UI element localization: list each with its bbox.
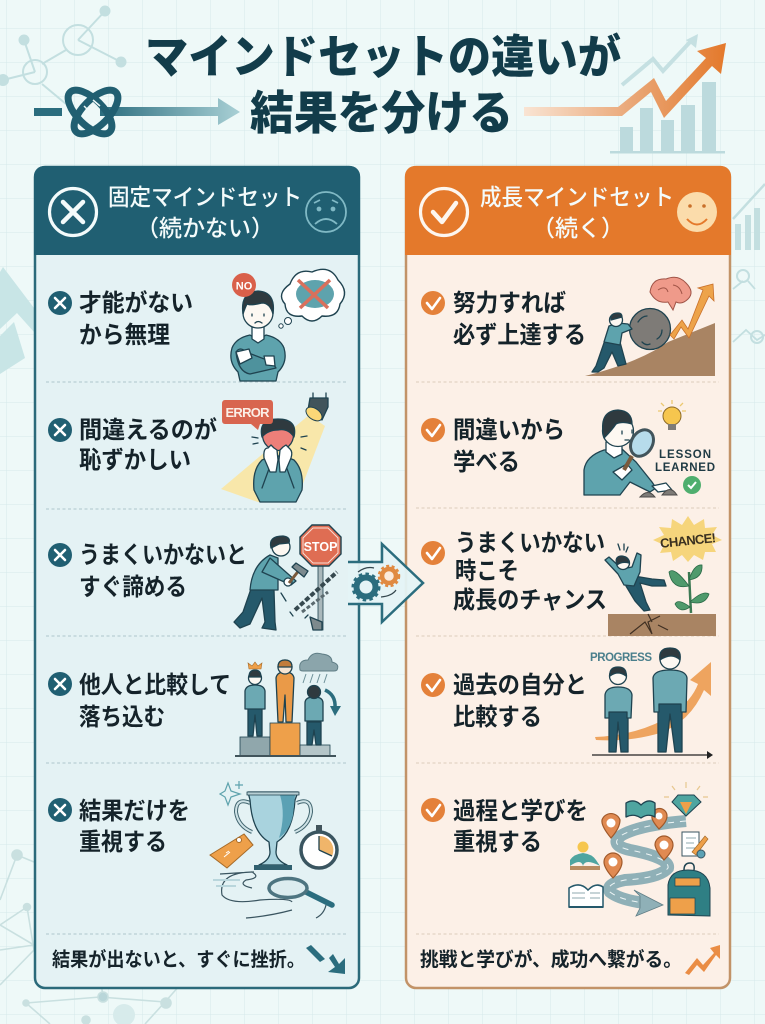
panel header: growth mindset (405, 166, 731, 255)
item 4: comparing: 他人と比較して (79, 672, 231, 699)
item 5: results only (48, 781, 337, 918)
bullet check (421, 798, 445, 822)
rain cloud (300, 653, 338, 683)
panel: fixed mindset (34, 166, 360, 988)
illustration: progress figures: PROGRESS (590, 652, 652, 664)
item 2: learn from mistakes (421, 400, 715, 497)
item 3: failure is chance: 成長のチャンス (453, 587, 607, 614)
gear teal (353, 574, 379, 600)
item 3: give up: すぐ諦める (79, 574, 187, 601)
panel header: growth mindset: 成長マインドセット (480, 184, 674, 210)
green check (683, 476, 701, 494)
thought bubble: crossed brain (279, 269, 345, 328)
illustration: falling person and sprout (605, 516, 722, 636)
bottom message: growth (420, 945, 720, 975)
illustration: person breaking chain at stop sign (234, 525, 341, 630)
icon: falling arrow (306, 945, 345, 974)
item 3: failure is chance: うまくいかない (455, 530, 605, 557)
title: 結果を分ける (250, 87, 513, 139)
background network top left (0, 6, 126, 104)
gear orange (379, 566, 399, 586)
person centre (276, 660, 294, 722)
item 2: embarrassed (48, 393, 328, 502)
bottom message: fixed: 結果が出ないと、すぐに挫折。 (52, 948, 305, 971)
illustration: person with magnifier (584, 400, 715, 497)
icon: check circle (420, 188, 468, 236)
diamond (664, 782, 708, 816)
item 4: compare with past self: 過去の自分と (453, 672, 587, 699)
bottom message: growth: 挑戦と学びが、成功へ繋がる。 (420, 948, 682, 971)
item 5: results only: 重視する (79, 829, 167, 856)
arrow between panels with gears (348, 544, 423, 622)
item 3: failure is chance (421, 516, 722, 636)
item 1: no talent: 才能がない (79, 289, 193, 317)
burst: CHANCE! (659, 530, 717, 551)
icon: tangled knot with arrow (34, 83, 240, 141)
background chart right (733, 184, 765, 343)
spotlight lamp (303, 393, 328, 424)
panel header: fixed mindset (34, 166, 360, 255)
location pins (602, 808, 673, 878)
item 4: comparing: 落ち込む (79, 704, 165, 731)
bullet cross (48, 672, 72, 696)
icon: smiling face (677, 192, 717, 232)
panel header: fixed mindset: 固定マインドセット (108, 184, 302, 210)
illustration: person hiding face in spotlight (221, 393, 328, 502)
light bulb (658, 400, 686, 430)
green book top (626, 801, 655, 818)
open book (569, 885, 603, 908)
item 4: compare with past self: 比較する (453, 704, 542, 731)
stopwatch (301, 825, 337, 868)
title (145, 31, 621, 139)
item 3: failure is chance: 時こそ (455, 558, 519, 585)
backpack (668, 863, 710, 916)
bullet check (421, 673, 445, 697)
magnifier (624, 426, 658, 470)
LESSON LEARNED label: LESSON (659, 449, 711, 461)
magnifier and scribble (213, 872, 332, 918)
person right (305, 686, 323, 745)
item 4: comparing (48, 653, 341, 757)
item 1: effort: 必ず上達する (453, 322, 586, 349)
icon: sad face (306, 192, 346, 232)
hammer (289, 563, 308, 583)
item 2: embarrassed: 間違えるのが (79, 416, 217, 444)
icon: growth chart with arrow (524, 34, 726, 154)
item 1: effort: 努力すれば (453, 290, 566, 317)
bullet cross (48, 798, 72, 822)
falling person (605, 544, 666, 611)
item 1: no talent: から無理 (79, 322, 170, 349)
item 2: learn from mistakes: 学べる (453, 449, 520, 476)
item 5: process and learning: 過程と学びを (453, 798, 588, 825)
ERROR sign: ERROR (226, 405, 270, 420)
item 1: effort (421, 277, 715, 376)
bullet cross (48, 291, 72, 315)
item 4: compare with past self (421, 648, 713, 759)
item 2: learn from mistakes: 間違いから (453, 417, 565, 444)
LESSON LEARNED label: LEARNED (655, 462, 715, 474)
panel: growth mindset (405, 166, 731, 988)
background shapes left (0, 267, 34, 374)
illustration: pushing boulder uphill (585, 277, 715, 376)
title: マインドセットの違いが (145, 31, 621, 83)
background network bottom left (0, 850, 180, 1024)
item 5: results only: 結果だけを (79, 798, 190, 825)
illustration: trophy, stopwatch, magnifier (210, 781, 337, 918)
illustration: winding road (569, 782, 710, 916)
brain (650, 277, 691, 310)
older self (653, 648, 687, 752)
icon: cross circle (50, 188, 96, 236)
LESSON LEARNED label (655, 449, 715, 474)
item 5: process and learning (421, 782, 710, 916)
younger self (605, 667, 632, 752)
rocks (640, 490, 677, 497)
bullet check (421, 541, 445, 565)
person left with crown (245, 662, 265, 736)
rising arrow (670, 284, 714, 339)
icon: rising arrow (685, 945, 720, 975)
notepad and pencil (682, 832, 708, 858)
illustration: worried person (231, 269, 345, 381)
item 3: give up (48, 525, 341, 630)
price tag (210, 834, 253, 868)
down arrow (325, 690, 341, 716)
illustration: progress figures (590, 648, 713, 759)
illustration: podium with people (235, 653, 341, 757)
panel header: fixed mindset: （続かない） (136, 215, 274, 241)
panel header: growth mindset: （続く） (532, 215, 624, 241)
stop sign: STOP (304, 540, 337, 554)
item 5: process and learning: 重視する (453, 829, 542, 856)
bullet cross (48, 543, 72, 567)
bullet check (421, 418, 445, 442)
bullet check (421, 291, 445, 315)
sparkle (220, 783, 240, 805)
item 2: embarrassed: 恥ずかしい (79, 447, 191, 474)
sprout (669, 565, 709, 613)
bullet cross (48, 418, 72, 442)
NO badge: NO (236, 280, 253, 292)
item 3: give up: うまくいかないと (79, 542, 247, 569)
sprout book (570, 842, 600, 870)
item 1: no talent (48, 269, 345, 381)
